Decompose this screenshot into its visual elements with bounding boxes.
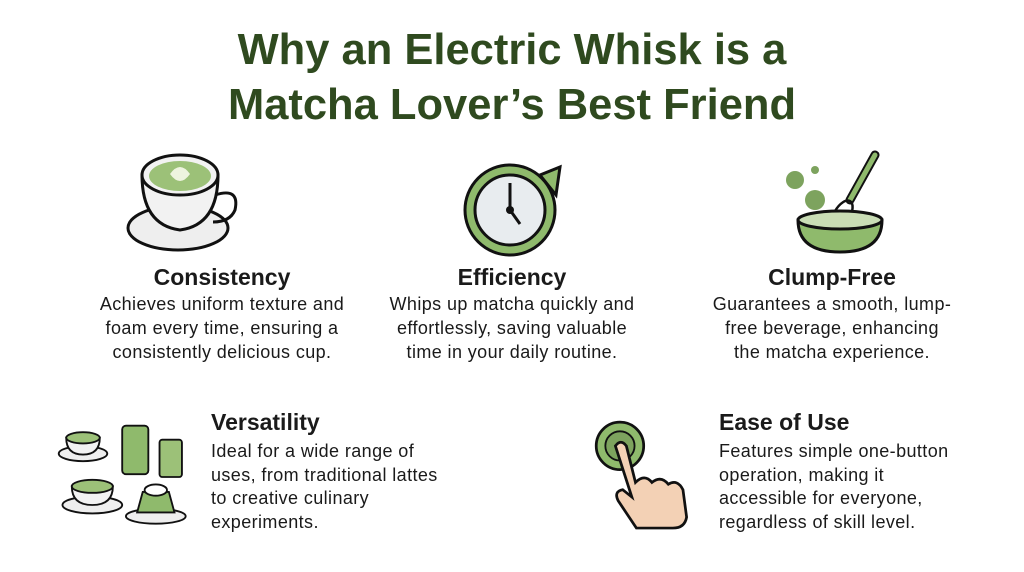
block: ease of use: operation, making it	[719, 464, 884, 484]
block: consistency: foam every time, ensuring a	[106, 318, 338, 338]
icon: clock with arrow	[464, 164, 562, 256]
block: consistency	[100, 264, 344, 362]
block: ease of use: Features simple one-button	[719, 441, 949, 461]
title: Why an Electric Whisk is a	[238, 26, 786, 74]
block: efficiency: time in your daily routine.	[407, 342, 617, 362]
block: consistency: Achieves uniform texture and	[100, 294, 344, 314]
block: versatility: to creative culinary	[211, 488, 369, 508]
block: ease of use	[719, 409, 949, 532]
block: clump-free	[713, 264, 951, 362]
block: clump-free: free beverage, enhancing	[725, 318, 939, 338]
block: versatility: experiments.	[211, 512, 319, 532]
block: ease of use: Ease of Use	[719, 409, 849, 435]
title	[228, 26, 796, 129]
block: ease of use: regardless of skill level.	[719, 512, 915, 532]
icon: finger pressing button	[594, 420, 688, 530]
block: consistency: consistently delicious cup.	[113, 342, 331, 362]
block: clump-free: Guarantees a smooth, lump-	[713, 294, 951, 314]
title: Matcha Lover’s Best Friend	[228, 81, 796, 129]
block: consistency: Consistency	[154, 264, 290, 290]
block: efficiency: effortlessly, saving valuable	[397, 318, 627, 338]
block: clump-free: Clump-Free	[768, 264, 896, 290]
block: efficiency: Whips up matcha quickly and	[390, 294, 634, 314]
block: versatility: Ideal for a wide range of	[211, 441, 414, 461]
block: efficiency	[390, 264, 634, 362]
block: efficiency: Efficiency	[458, 264, 566, 290]
icon: matcha latte cup	[126, 154, 238, 252]
block: versatility: Versatility	[211, 409, 320, 435]
icon: matcha drinks	[58, 424, 187, 525]
block: versatility: uses, from traditional lattes	[211, 464, 438, 484]
block: versatility	[211, 409, 438, 532]
block: ease of use: accessible for everyone,	[719, 488, 923, 508]
icon: whisk and bowl	[786, 150, 884, 254]
block: clump-free: the matcha experience.	[734, 342, 930, 362]
